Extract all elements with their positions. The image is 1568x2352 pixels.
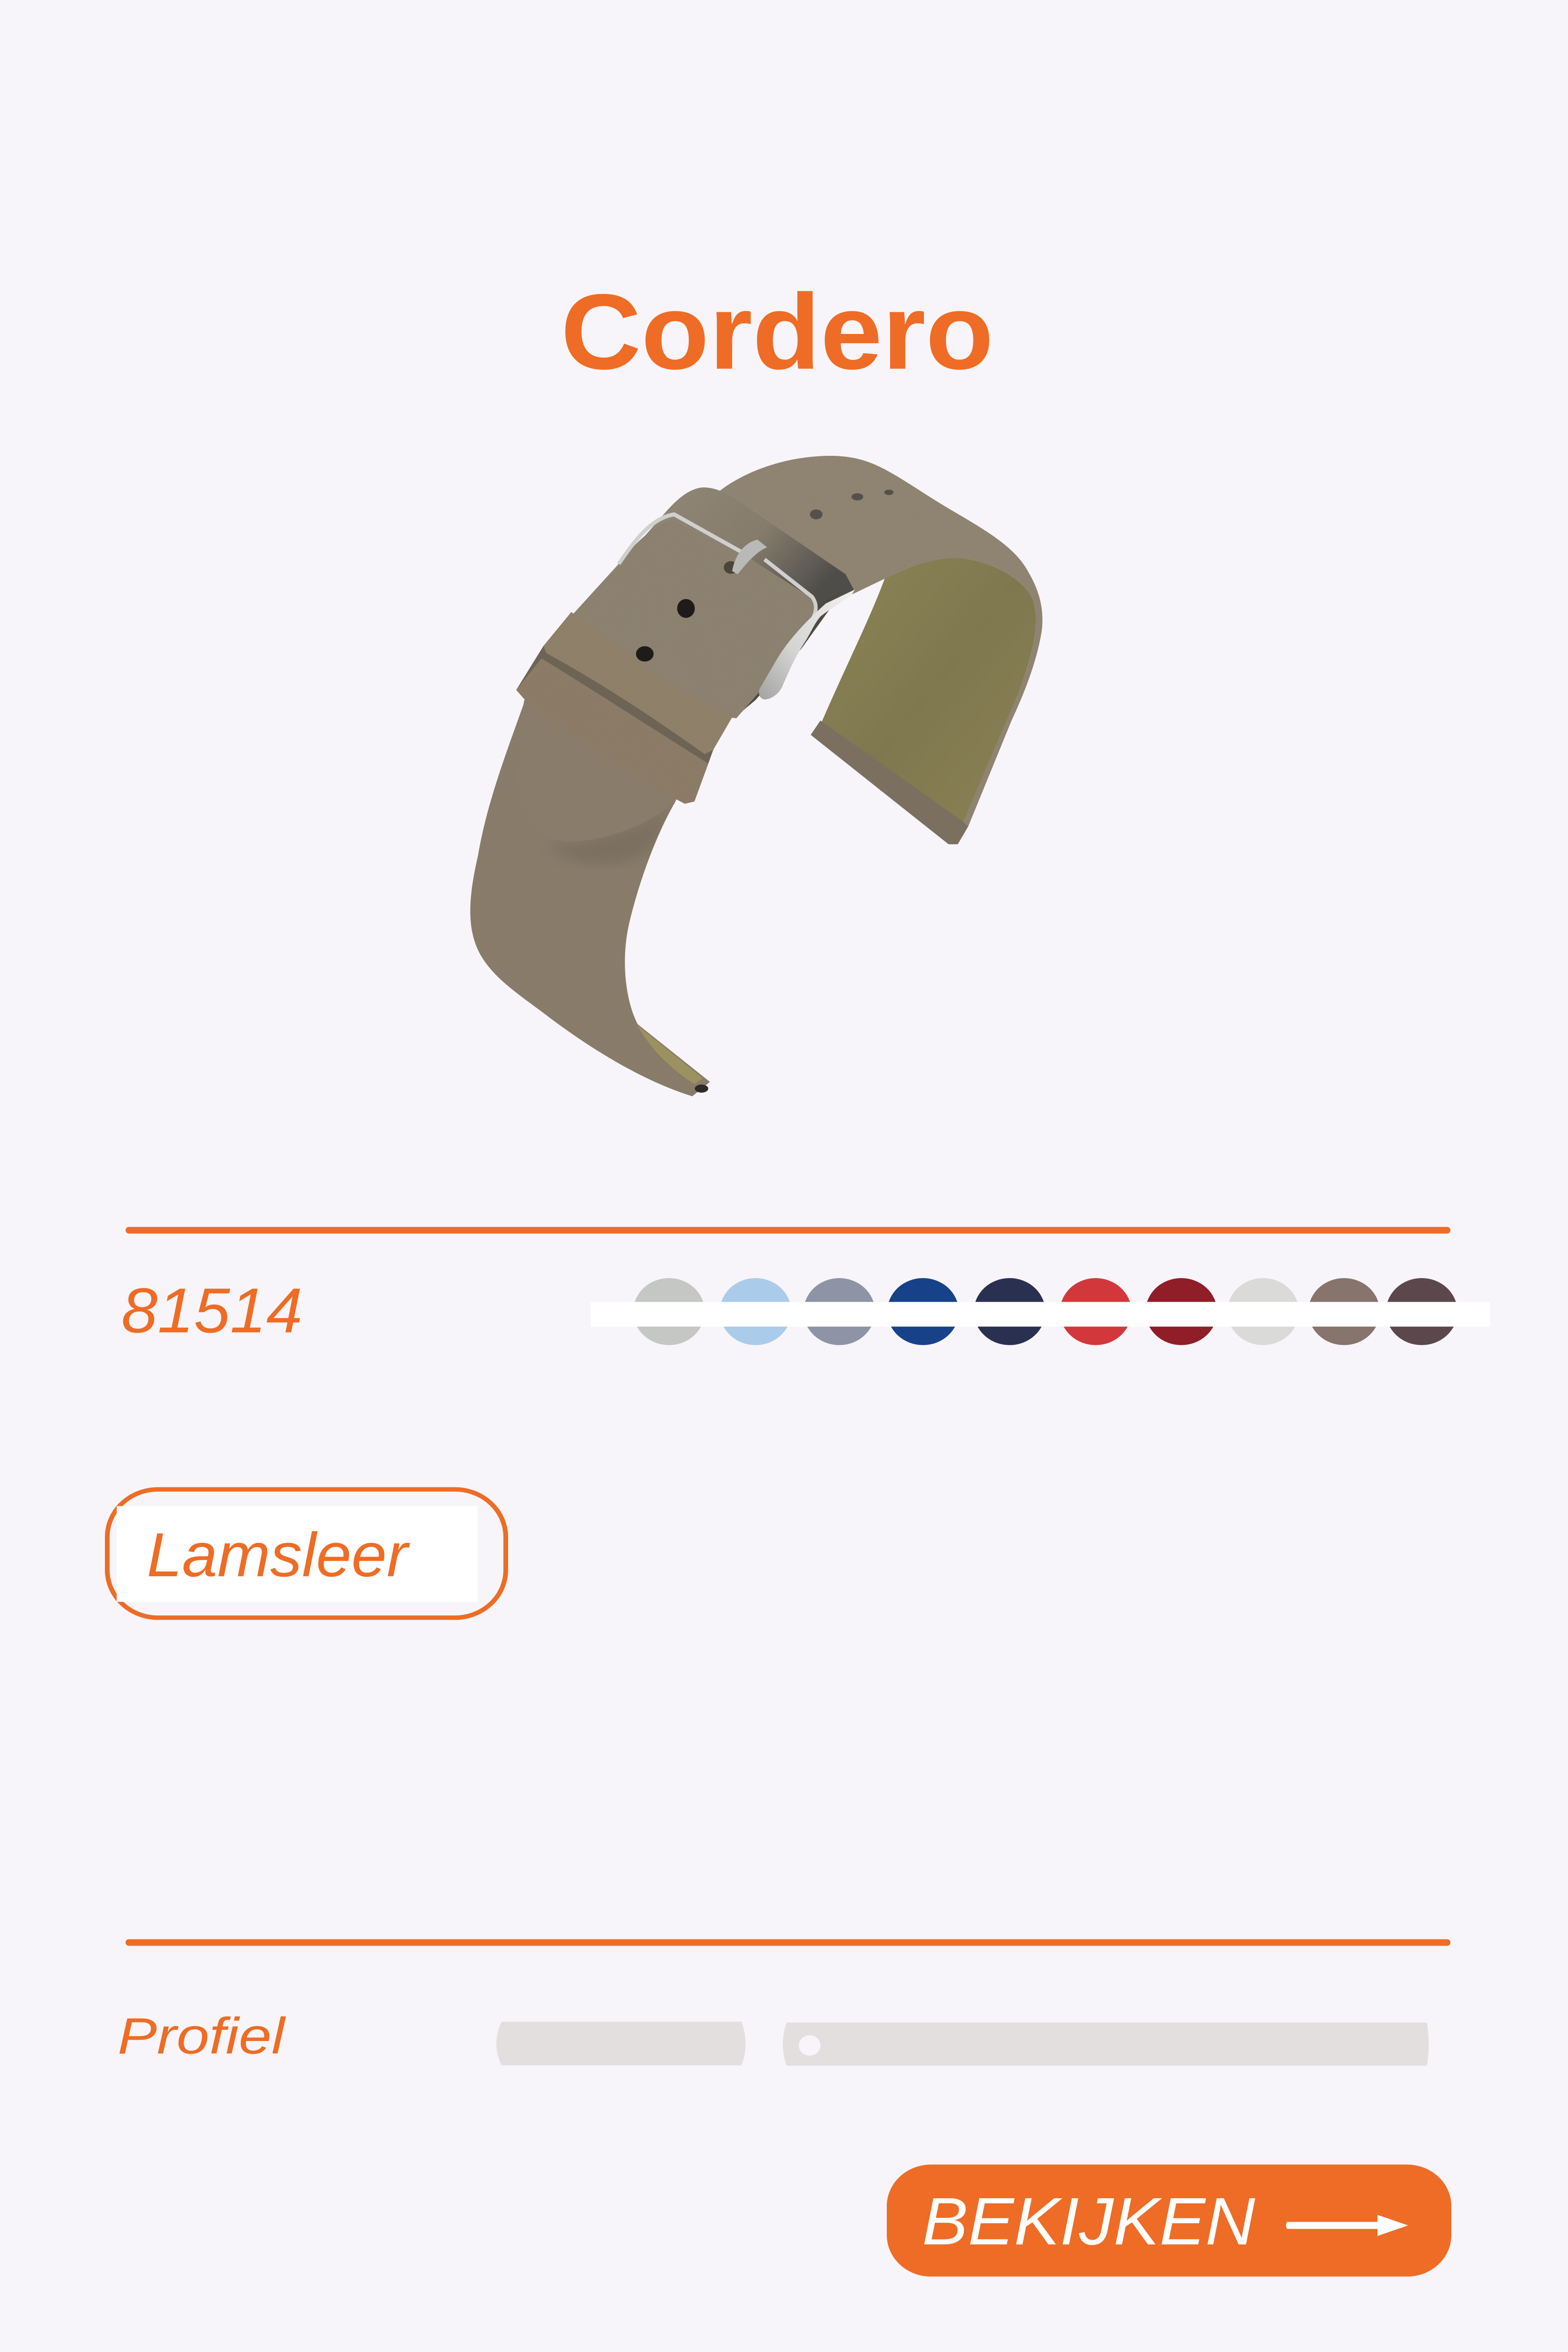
button bbox=[887, 2165, 1451, 2277]
divider top bbox=[126, 1227, 1450, 1233]
tag white box bbox=[117, 1506, 478, 1602]
shadow under buckle bar bbox=[736, 590, 844, 716]
button shape bbox=[887, 2165, 1451, 2277]
strap top band bbox=[720, 456, 1043, 826]
strap tongue bbox=[516, 689, 692, 841]
upper strap holes bbox=[810, 490, 893, 519]
button label: BEKIJKEN bbox=[922, 2185, 1256, 2259]
strap cut edge bbox=[811, 721, 968, 844]
tag label: Lamsleer bbox=[147, 1520, 410, 1589]
buckle frame bbox=[619, 514, 816, 671]
tongue shade bbox=[563, 819, 662, 862]
strap tip hole bbox=[695, 1085, 708, 1093]
front strap bbox=[568, 520, 815, 718]
profile diagram bbox=[496, 2022, 1429, 2066]
buckle bbox=[619, 514, 855, 699]
swatch overlay band bbox=[591, 1302, 1490, 1327]
article number: 81514 bbox=[121, 1275, 302, 1346]
lower strap loop bbox=[516, 659, 708, 804]
strap lining bbox=[820, 558, 1036, 826]
title: Cordero bbox=[561, 272, 994, 391]
lower strap bbox=[470, 702, 710, 1096]
tag outline bbox=[107, 1489, 506, 1618]
buckle keeper leather bbox=[620, 487, 854, 617]
arrow bbox=[1286, 2215, 1408, 2236]
strap holes bbox=[636, 561, 738, 661]
divider bottom bbox=[126, 1939, 1450, 1946]
long strap profile bbox=[783, 2023, 1429, 2066]
upper strap loop bbox=[543, 612, 733, 754]
profile label: Profiel bbox=[118, 2007, 286, 2064]
buckle pin bbox=[732, 540, 767, 574]
material tag bbox=[107, 1489, 506, 1618]
product image: leather watch strap bbox=[470, 456, 1043, 1096]
strap loop base bbox=[516, 646, 713, 804]
strap profile hole bbox=[799, 2035, 820, 2056]
strap tip lining bbox=[637, 1025, 703, 1084]
buckle bar bbox=[759, 589, 855, 699]
colour swatches bbox=[591, 1278, 1490, 1345]
short strap profile bbox=[496, 2022, 746, 2066]
